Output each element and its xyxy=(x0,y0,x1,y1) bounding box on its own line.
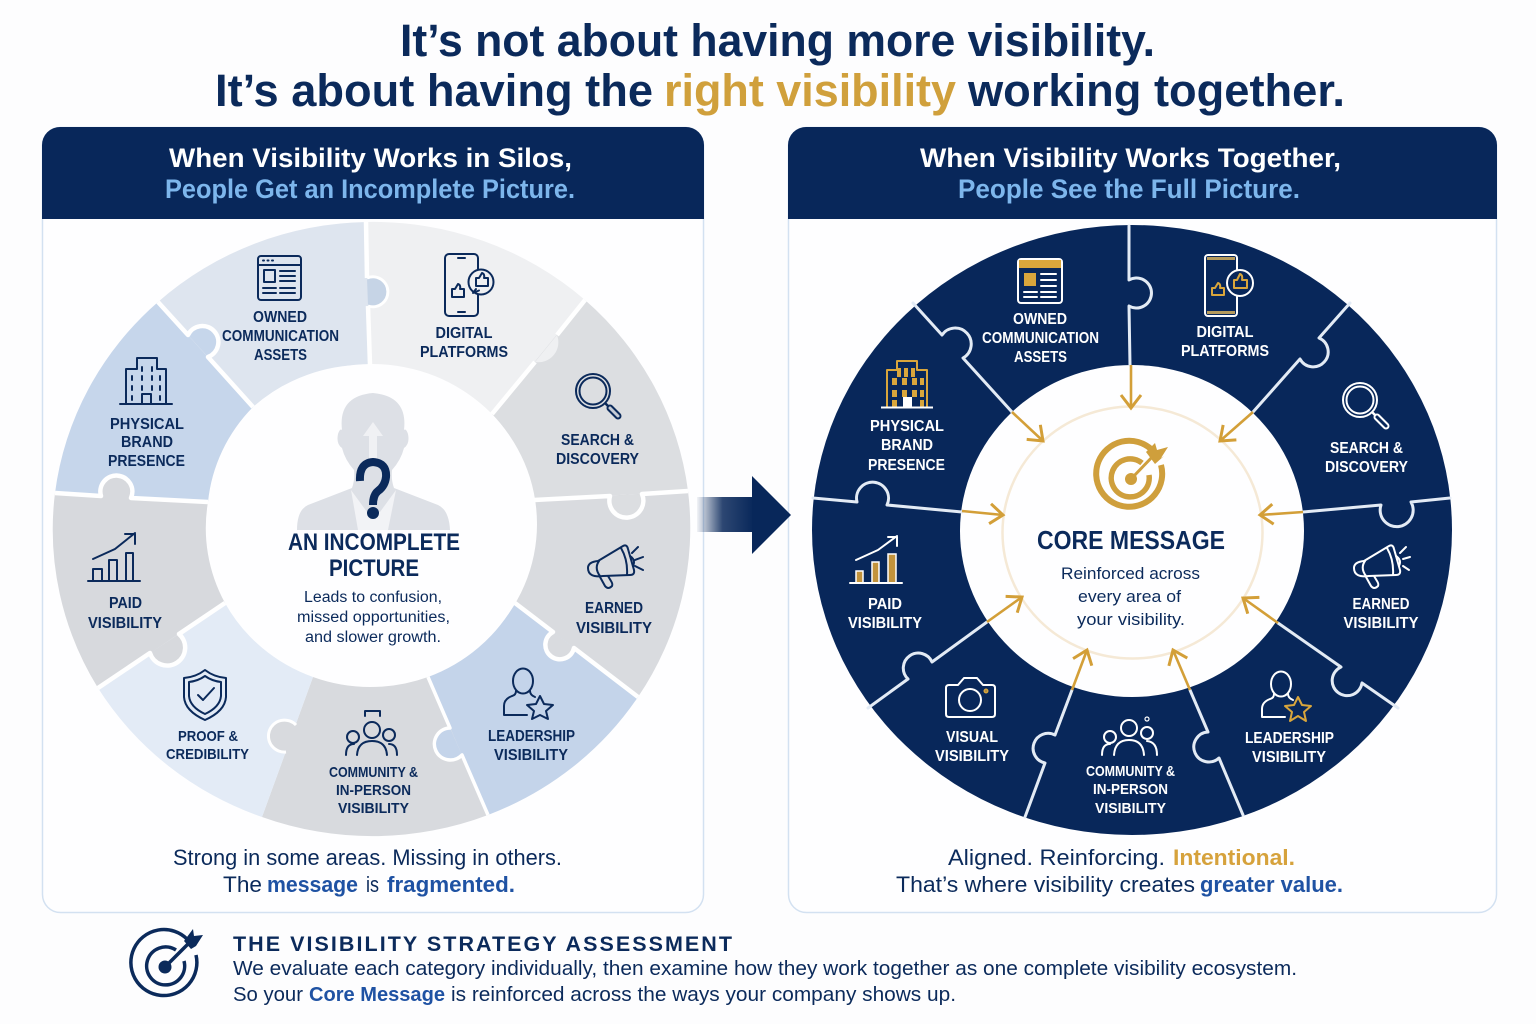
segment: community and in-person visibility: IN-PERSON xyxy=(336,782,411,799)
icon: person with star xyxy=(504,668,553,719)
right caption: Aligned. Reinforcing. xyxy=(948,845,1165,870)
segment: community and in-person visibility: COMMUNITY & xyxy=(329,764,418,781)
segment: digital platforms: DIGITAL xyxy=(436,325,493,342)
segment: visual visibility: VISUAL xyxy=(946,729,998,746)
segment: community and in-person visibility xyxy=(329,711,418,817)
segment: earned visibility: VISIBILITY xyxy=(1344,615,1419,632)
icon: person with star xyxy=(1262,672,1311,721)
segment: paid visibility: VISIBILITY xyxy=(848,615,922,632)
assessment text block: is reinforced across the ways your company shows up. xyxy=(451,984,956,1006)
segment: owned communication assets: COMMUNICATION xyxy=(222,328,339,345)
segment: digital platforms xyxy=(420,254,508,361)
segment: owned communication assets: ASSETS xyxy=(1014,349,1067,366)
assessment text block: THE VISIBILITY STRATEGY ASSESSMENT xyxy=(233,932,732,956)
segment: leadership visibility: LEADERSHIP xyxy=(488,728,575,745)
icon: group of people xyxy=(1102,717,1157,755)
segment: paid visibility xyxy=(88,533,162,632)
segment: owned communication assets: COMMUNICATION xyxy=(982,330,1099,347)
segment: search and discovery xyxy=(1325,383,1408,476)
segment: digital platforms: DIGITAL xyxy=(1196,324,1254,341)
segment: search and discovery: SEARCH & xyxy=(561,432,634,449)
connected puzzle wheel xyxy=(812,225,1452,835)
icon: magnifier xyxy=(576,374,618,416)
icon: rising bars xyxy=(850,536,902,583)
center text: an incomplete picture: Leads to confusion, xyxy=(304,589,442,606)
segment: earned visibility: EARNED xyxy=(1352,596,1410,613)
segment: paid visibility: VISIBILITY xyxy=(88,615,162,632)
icon: megaphone xyxy=(1354,545,1410,588)
segment: physical brand presence xyxy=(108,358,185,470)
silos panel header: People Get an Incomplete Picture. xyxy=(165,174,575,204)
center text: an incomplete picture: AN INCOMPLETE xyxy=(288,529,460,556)
segment: proof and credibility: CREDIBILITY xyxy=(166,746,249,763)
segment: community and in-person visibility xyxy=(1086,717,1175,817)
segment: physical brand presence: PRESENCE xyxy=(868,457,945,474)
icon: building xyxy=(881,361,933,408)
center text: an incomplete picture xyxy=(288,529,460,646)
segment: leadership visibility xyxy=(1245,672,1334,766)
segment: community and in-person visibility: VISIBILITY xyxy=(1095,800,1166,817)
icon: navy target xyxy=(131,929,203,996)
segment: leadership visibility: VISIBILITY xyxy=(494,747,568,764)
assessment text block: So your xyxy=(233,984,303,1006)
together panel header xyxy=(788,127,1497,219)
left caption: Strong in some areas. Missing in others. xyxy=(173,845,562,870)
right caption: That’s where visibility creates xyxy=(896,872,1195,897)
segment: digital platforms xyxy=(1181,255,1269,360)
right caption: greater value. xyxy=(1200,872,1343,897)
segment: leadership visibility: LEADERSHIP xyxy=(1245,730,1334,747)
segment: leadership visibility xyxy=(488,668,575,764)
title: It’s about having the xyxy=(215,65,653,116)
icon: phone with likes xyxy=(445,254,494,316)
assessment text block: Core Message xyxy=(309,984,445,1006)
left caption xyxy=(173,845,562,897)
segment: leadership visibility: VISIBILITY xyxy=(1252,749,1326,766)
left caption: is xyxy=(366,872,379,897)
icon: faceless silhouette with question mark xyxy=(297,393,450,530)
right caption: Intentional. xyxy=(1173,845,1295,870)
icon: group of people xyxy=(346,711,397,755)
segment: physical brand presence xyxy=(868,361,945,474)
center text: an incomplete picture: missed opportunities, xyxy=(297,609,450,626)
center text: an incomplete picture: and slower growth. xyxy=(305,629,441,646)
segment: earned visibility xyxy=(576,545,652,637)
segment: search and discovery: DISCOVERY xyxy=(556,451,639,468)
segment: earned visibility: VISIBILITY xyxy=(576,620,652,637)
segment: visual visibility: VISIBILITY xyxy=(935,748,1009,765)
segment: visual visibility xyxy=(935,678,1009,765)
segment: physical brand presence: PHYSICAL xyxy=(870,418,944,435)
panel: together xyxy=(788,127,1497,912)
segment: paid visibility xyxy=(848,536,922,632)
icon: camera xyxy=(946,678,995,717)
segment: search and discovery: DISCOVERY xyxy=(1325,459,1408,476)
icon: shield xyxy=(184,670,226,720)
title: It’s not about having more visibility. xyxy=(400,15,1155,66)
icon: browser xyxy=(1018,259,1062,303)
icon: megaphone xyxy=(588,545,643,588)
segment: physical brand presence: BRAND xyxy=(881,437,933,454)
segment: paid visibility: PAID xyxy=(868,596,902,613)
arrows: converging on core message xyxy=(962,365,1303,690)
segment: owned communication assets: OWNED xyxy=(1013,311,1067,328)
together panel header: People See the Full Picture. xyxy=(958,174,1300,204)
panel: silos xyxy=(42,127,704,912)
assessment text block: We evaluate each category individually, then examine how they work together as one complete visibility ecosystem. xyxy=(233,958,1297,980)
segment: owned communication assets: OWNED xyxy=(253,309,307,326)
segment: physical brand presence: PHYSICAL xyxy=(110,416,184,433)
icon: rising bars xyxy=(88,533,140,581)
center text: core message: CORE MESSAGE xyxy=(1037,525,1225,555)
segment: owned communication assets xyxy=(982,259,1099,366)
silos panel header: When Visibility Works in Silos, xyxy=(169,143,572,173)
segment: community and in-person visibility: IN-PERSON xyxy=(1093,781,1168,798)
icon: gold target with arrow xyxy=(1096,441,1168,507)
together panel header: When Visibility Works Together, xyxy=(920,143,1341,173)
segment: community and in-person visibility: VISIBILITY xyxy=(338,800,409,817)
segment: physical brand presence: BRAND xyxy=(121,434,173,451)
icon: browser xyxy=(258,256,301,300)
right caption xyxy=(896,845,1343,897)
left caption: The xyxy=(223,872,262,897)
icon: building xyxy=(120,358,172,404)
title: right visibility xyxy=(664,65,956,116)
left caption: fragmented. xyxy=(387,872,515,897)
icon: magnifier xyxy=(1343,383,1386,426)
center text: core message: your visibility. xyxy=(1077,610,1185,629)
icon: phone with likes xyxy=(1205,255,1253,316)
fragmented puzzle wheel xyxy=(53,222,690,836)
center text: an incomplete picture: PICTURE xyxy=(329,555,419,582)
segment: search and discovery xyxy=(556,374,639,468)
center text: core message: every area of xyxy=(1078,587,1181,606)
segment: paid visibility: PAID xyxy=(109,595,142,612)
segment: proof and credibility xyxy=(166,670,249,763)
left caption: message xyxy=(267,872,358,897)
segment: earned visibility xyxy=(1344,545,1419,632)
segment: owned communication assets: ASSETS xyxy=(254,347,307,364)
segment: search and discovery: SEARCH & xyxy=(1330,440,1403,457)
assessment text block xyxy=(233,932,1297,1006)
segment: earned visibility: EARNED xyxy=(585,600,643,617)
segment: digital platforms: PLATFORMS xyxy=(1181,343,1269,360)
arrow: silos to together xyxy=(697,476,791,554)
segment: community and in-person visibility: COMMUNITY & xyxy=(1086,763,1175,780)
title xyxy=(215,15,1345,116)
segment: proof and credibility: PROOF & xyxy=(178,728,238,745)
segment: physical brand presence: PRESENCE xyxy=(108,453,185,470)
segment: digital platforms: PLATFORMS xyxy=(420,344,508,361)
silos panel header xyxy=(42,127,704,219)
center text: core message: Reinforced across xyxy=(1061,564,1200,583)
segment: owned communication assets xyxy=(222,256,339,364)
center text: core message xyxy=(1037,525,1225,629)
title: working together. xyxy=(967,65,1345,116)
